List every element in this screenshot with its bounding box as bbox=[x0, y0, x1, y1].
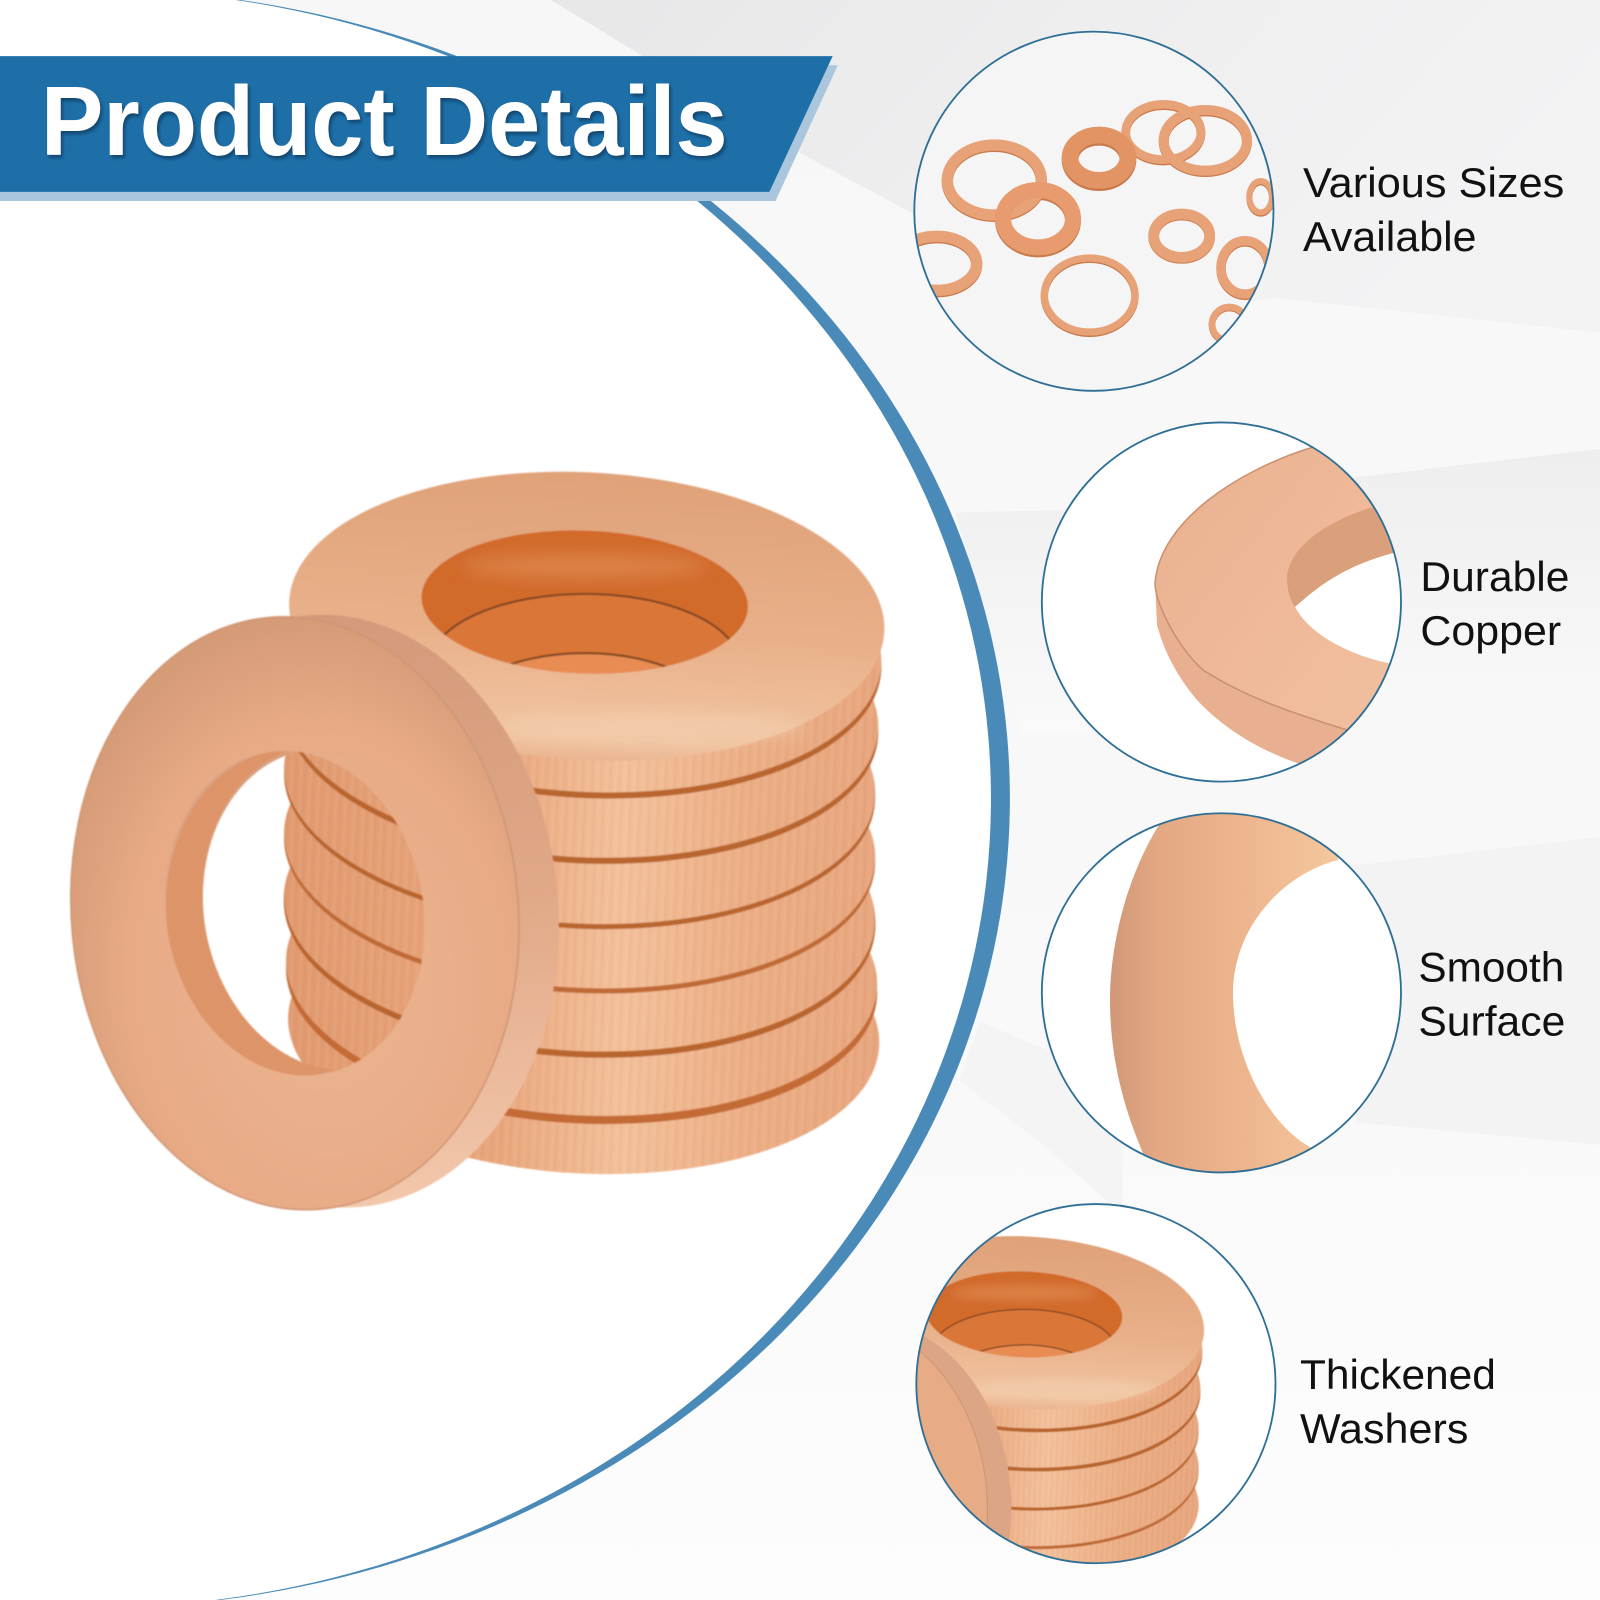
label: durable copper bbox=[1420, 553, 1569, 654]
label: thickened washers: Thickened bbox=[1300, 1351, 1496, 1398]
washer close-up bbox=[1110, 814, 1338, 1172]
title banner bbox=[0, 56, 838, 201]
panel: thickened washers inset bbox=[915, 1203, 1276, 1564]
upper washers in stack with top face and hole bbox=[277, 457, 892, 1066]
label: smooth surface: Smooth bbox=[1418, 944, 1564, 991]
panel: durable copper inset bbox=[1040, 422, 1402, 782]
label: various sizes: Available bbox=[1303, 213, 1477, 260]
lower washers in stack bbox=[277, 756, 887, 1189]
inset border bbox=[916, 1204, 1276, 1563]
washer close-up bbox=[1154, 447, 1394, 764]
inset border bbox=[914, 32, 1273, 391]
inset border bbox=[1042, 422, 1401, 782]
blue curved arc bbox=[0, 0, 1010, 1600]
main photo: copper washers stack bbox=[46, 457, 892, 1229]
label: smooth surface bbox=[1418, 944, 1565, 1045]
label: various sizes bbox=[1303, 159, 1564, 260]
label: thickened washers: Washers bbox=[1300, 1405, 1468, 1452]
panel: smooth surface inset bbox=[1042, 790, 1401, 1190]
scattered washers bbox=[897, 104, 1272, 342]
label: durable copper: Copper bbox=[1420, 607, 1561, 654]
label: various sizes: Various Sizes bbox=[1303, 159, 1564, 206]
label: durable copper: Durable bbox=[1420, 553, 1569, 600]
inset border bbox=[1042, 813, 1401, 1172]
enlarged stack view bbox=[917, 1236, 1205, 1562]
label: thickened washers bbox=[1300, 1351, 1496, 1452]
label: smooth surface: Surface bbox=[1418, 998, 1565, 1045]
panel: various sizes inset bbox=[897, 32, 1273, 391]
front washer bbox=[69, 614, 560, 1212]
white main panel bbox=[0, 0, 991, 1600]
title text: Product Details bbox=[41, 66, 728, 176]
